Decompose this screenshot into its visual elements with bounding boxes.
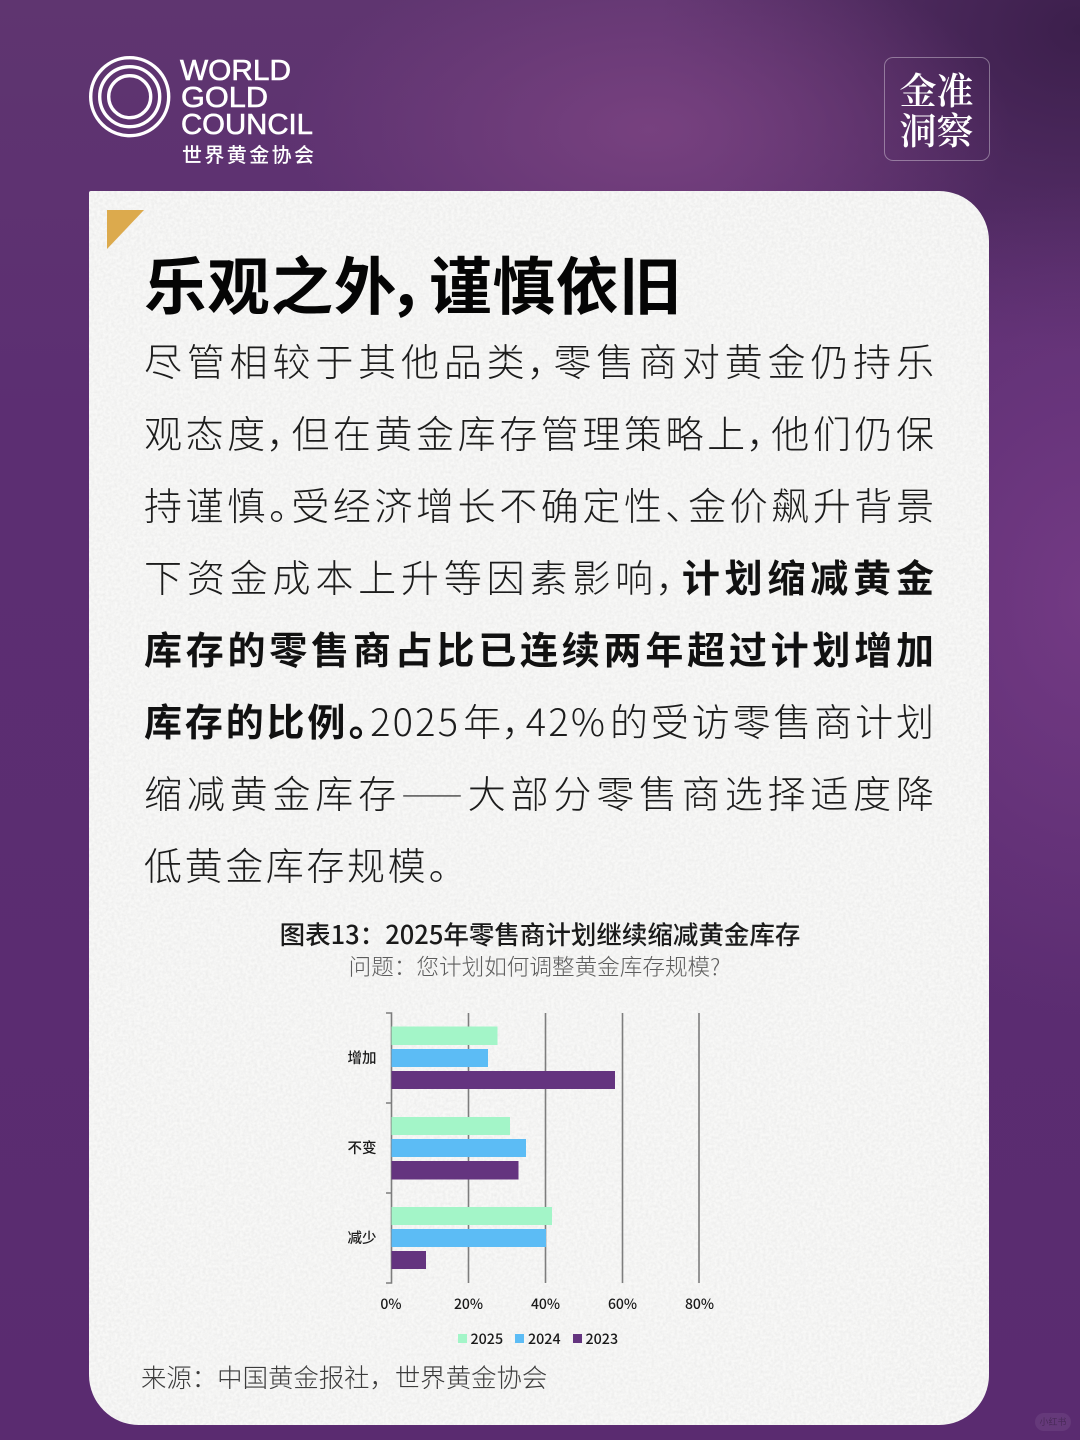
badge: 金准洞察: 金准: [900, 61, 974, 115]
x axis labels: 0%: [380, 1294, 402, 1314]
x axis labels: 80%: [685, 1294, 714, 1314]
x axis labels: 20%: [454, 1294, 483, 1314]
bars: 减少: [392, 1207, 552, 1269]
body text: 观态度，但在黄金库存管理策略上，他们仍保: [144, 404, 934, 459]
legend: 2025: [470, 1328, 503, 1349]
body text: 库存的零售商占比已连续两年超过计划增加: [144, 620, 934, 675]
body text: 尽管相较于其他品类，零售商对黄金仍持乐: [144, 332, 934, 387]
x axis labels: 40%: [531, 1294, 560, 1314]
title: 乐观之外，谨慎依旧: [144, 237, 682, 328]
legend: 2023: [586, 1328, 618, 1349]
icon: concentric rings: [91, 58, 169, 136]
source note: 来源：中国黄金报社，世界黄金协会: [141, 1359, 547, 1395]
x axis labels: [380, 1294, 714, 1314]
body text: [144, 332, 934, 891]
badge: 金准洞察: [884, 57, 990, 161]
body text: 下资金成本上升等因素影响，计划缩减黄金: [144, 548, 934, 603]
bar chart: [348, 1012, 714, 1349]
legend: 2024: [528, 1328, 561, 1349]
chart subtitle: 问题：您计划如何调整黄金库存规模?: [349, 949, 720, 982]
logo wordmark: WORLD: [180, 55, 291, 87]
icon: gold corner triangle: [107, 210, 144, 249]
category labels: 减少: [348, 1227, 376, 1248]
watermark: [1035, 1413, 1071, 1431]
panel: main card: [89, 191, 989, 1425]
body text: 持谨慎。受经济增长不确定性、金价飙升背景: [144, 476, 934, 531]
badge: 金准洞察: 洞察: [900, 101, 974, 155]
body text: 低黄金库存规模。: [144, 836, 450, 891]
legend: [458, 1328, 618, 1349]
watermark: 小红书: [1039, 1415, 1066, 1428]
logo wordmark: [180, 55, 313, 141]
chart title: 图表13：2025年零售商计划继续缩减黄金库存: [280, 915, 800, 952]
category labels: [348, 1047, 376, 1248]
bars: 不变: [392, 1117, 526, 1180]
category labels: 不变: [348, 1137, 376, 1158]
logo Chinese name: 世界黄金协会: [182, 139, 314, 168]
logo wordmark: GOLD: [181, 82, 268, 114]
category labels: 增加: [348, 1047, 376, 1068]
body text: 缩减黄金库存——大部分零售商选择适度降: [144, 764, 934, 819]
bars: 增加: [392, 1026, 615, 1089]
logo: World Gold Council: [89, 55, 314, 168]
logo wordmark: COUNCIL: [181, 109, 313, 141]
body text: 库存的比例。2025年，42%的受访零售商计划: [144, 692, 934, 747]
x axis labels: 60%: [608, 1294, 637, 1314]
